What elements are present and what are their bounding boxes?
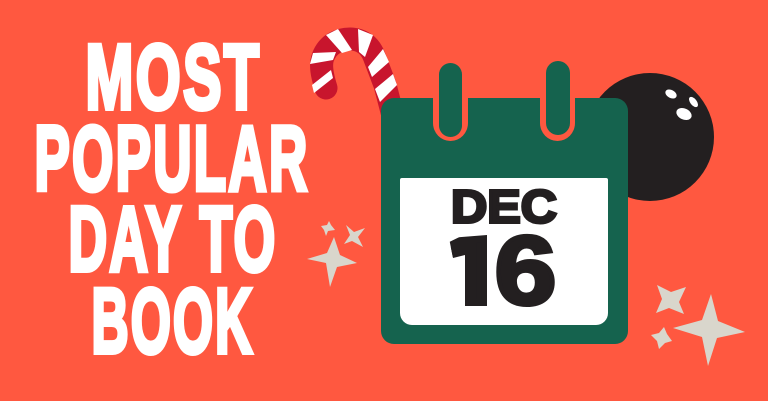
- sparkles: right group: [651, 285, 745, 366]
- calendar body: [381, 98, 628, 344]
- day number: 1: [440, 216, 512, 325]
- icon: bowling ball: [586, 73, 714, 201]
- title: [34, 26, 310, 372]
- title: MOST: [86, 26, 262, 128]
- month label: DEC: [451, 180, 557, 232]
- day number: 6: [494, 216, 556, 325]
- sparkles: left group: [307, 221, 365, 287]
- title: DAY TO: [68, 188, 278, 290]
- calendar: [381, 61, 628, 344]
- date card: [400, 178, 608, 325]
- title: POPULAR: [34, 108, 310, 210]
- day number: [450, 234, 555, 307]
- right ring: [540, 61, 575, 141]
- icon: candy cane: [310, 29, 397, 112]
- title: BOOK: [92, 270, 254, 372]
- left ring: [433, 63, 468, 141]
